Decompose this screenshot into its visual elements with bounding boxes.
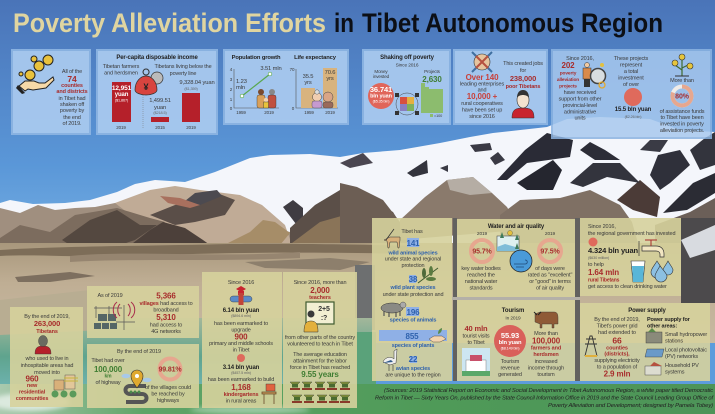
panel: wildlife species: Tibet has [401,229,423,235]
panel: teachers: from other parts of the country [285,335,355,341]
text: 202 projects: 202 [562,61,575,70]
panel: tourism: herdsmen [533,352,559,358]
red circle: tourism revenue [494,325,526,357]
title: in [334,8,354,38]
panel: tourism: to Tibet [467,340,485,346]
panel: clean drinking water: the regional government has invested [588,231,675,237]
icon: water drops [651,261,673,282]
icon: glass of water [631,261,645,282]
red circle: money invested: ($5.35 bln) [373,100,390,104]
panel: clean drinking water: Since 2016, [588,224,616,230]
panel: per-capita disposable income: Tibetan farmers [103,64,140,70]
panel: education funding: 900 [234,332,248,342]
panel: per-capita disposable income: poverty line [170,71,196,77]
panel: tourism: farmers and [531,346,561,352]
panel: relocation: new [27,383,38,389]
panel: tourism: In 2019 [505,316,521,322]
text: investment: These projects [614,56,649,62]
panel: wildlife species [372,218,452,381]
text: 74 counties: the end [63,115,81,121]
donut chart: 80 percent: alleviation projects. [660,128,705,134]
text: 202 projects: provincial-level [563,103,597,109]
panel: water and air quality: standards [469,286,493,292]
text: 202 projects: projects [559,84,577,90]
panel: power supply: systems [665,370,685,376]
panel: tourism: generated [498,372,522,378]
panel: education funding: kindergartens [224,392,258,398]
panel: shaking off poverty: invested [373,74,390,79]
text: enterprises: and [478,88,486,94]
panel: water and air quality: rated as "excellent" [528,272,572,278]
donut chart: 99.81 percent: 99.81% [158,366,182,374]
chart: population growth: mln [236,85,245,91]
panel: per-capita disposable income: and herdsmen [104,70,138,76]
chart: life expectancy: yrs [304,80,312,86]
icon: person with magnifier [583,62,606,88]
icon: night air [510,250,532,272]
text: investment: represent [620,62,643,68]
red circle: tourism revenue: 55.93 [501,331,519,340]
panel: tourism: Tourism [502,308,524,314]
panel: wildlife species: avian species [396,366,430,372]
panel: relocation: residential [19,390,46,396]
unit chart: projects: 2,630 [422,75,442,84]
text: 202 projects: alleviation [557,77,579,83]
panel: highways: 100,000 [94,365,123,374]
panel: teachers: teachers [309,295,331,301]
title: Poverty Alleviation Efforts [13,8,326,38]
icon: elderly couple [312,90,333,108]
unit chart: projects [421,75,443,118]
panel: clean drinking water: to help [588,262,604,268]
red circle: tourism revenue: bln yuan [499,340,522,346]
panel: water and air quality: key water bodies [461,266,501,272]
panel: wildlife species: 196 [406,308,420,317]
bar chart: 1,499.51 [149,98,171,104]
panel: wildlife species: protection [402,263,425,269]
panel: tourism: tourism [537,372,555,378]
chart: population growth: 3 [230,77,233,82]
panel: clean drinking water: 1.64 mln [588,268,619,277]
text: enterprises: have been set up [462,108,502,114]
panel: education funding: ($457.5 mln) [231,371,252,375]
panel: wildlife species: under state and regional [385,256,441,262]
icon: Tibetan person [35,336,51,354]
panel: power supply: stations [665,338,683,344]
panel: teachers [283,272,357,408]
panel: tourism: tourist visits [462,334,490,340]
panel: broadband: broadband [153,308,179,314]
icon: household PV [645,362,662,375]
chart: population growth: 4 [230,67,233,72]
icon: school desk [262,384,276,404]
chart: population growth: 2 [230,87,233,92]
panel: broadband: had access to [150,322,182,328]
panel: education funding: in rural areas [226,398,257,404]
panel: water and air quality: Water and air quality [488,224,545,230]
text: 202 projects: poverty [560,70,577,76]
panel: power supply: counties [606,346,628,352]
text: jobs [503,61,543,90]
chart: life expectancy: 35.5 [303,74,313,80]
panel: clean drinking water: 4.324 bln yuan [588,246,639,255]
title: Tibet Autonomous Region [362,8,663,38]
text: investment [614,56,652,119]
panel: clean drinking water: ($630 million) [588,256,610,260]
donut chart: 80 percent: 80% [675,94,690,100]
text: 74 counties [56,69,88,127]
icon: Potala palace [462,348,490,376]
donut chart: 80 percent [660,78,705,134]
icon: puzzle [395,93,419,115]
chart: population growth: 1.23 [236,79,247,85]
panel: tourism: 100,000 [532,336,561,346]
panel: education funding: ($894.6 mln) [231,314,252,318]
panel: broadband: As of 2019 [97,293,123,299]
panel: teachers: force in Tibet has reached [290,365,350,371]
panel: shaking off poverty: Projects [424,69,441,74]
panel: water and air quality: or "good" in terms [529,279,571,285]
panel: clean drinking water: get access to clean drinking water [588,284,667,290]
text: 74 counties: in Tibet had [58,96,86,102]
bar chart: yuan [154,105,166,111]
panel: education funding: Since 2016 [228,280,254,286]
text: enterprises: rural cooperatives [461,101,503,107]
text: 202 projects: units [574,116,586,122]
panel: power supply: 2.9 mln [604,370,631,378]
panel: relocation: communities [16,396,48,402]
bar chart: 2015 [155,125,165,130]
panel: relocation: 960 [26,374,39,384]
sources note: Reform in Tibet — Sixty Years On, published by the State Council Information Office in 2019 and the State Council Leading Group Office of [375,396,714,402]
red circle: money invested: bln yuan [370,94,393,100]
text: 202 projects: Since 2016, [566,56,594,62]
panel: power supply: to a population of [597,364,638,370]
icon: crane [383,349,397,371]
panel: highways: By the end of 2019 [117,349,161,355]
text: 74 counties: of 2019. [63,121,82,127]
panel: enterprises and jobs [454,50,547,124]
donut chart: 80 percent: invested in poverty [660,122,704,128]
panel: power supply: Power supply for [647,317,691,323]
panel: tourism: More than [534,331,558,337]
panel: power supply: By the end of 2019, [594,317,640,323]
panel: highways: Tibet had over [91,358,125,364]
chart: population growth: 3.51 mln [260,66,282,72]
panel: teachers: 9.55 years [301,370,339,379]
text: 202 projects [557,56,602,122]
chart: life expectancy: 70 [290,67,295,72]
panel: education funding: primary and middle schools [209,341,273,347]
panel: highways: be reached by [151,392,185,398]
panel: clean drinking water: rural Tibetans [588,278,620,284]
icon: joined hands [472,52,492,72]
bar chart: ($218.5) [153,111,167,115]
icon: money tree [672,54,693,76]
panel: tourism: Tourism [501,359,520,365]
panel: tourism: income through [528,366,564,372]
text: enterprises: 10,000 + [467,92,498,101]
panel: tourism: revenue [500,366,520,372]
text: jobs: 238,000 [510,74,536,83]
unit chart: projects: =100 [434,114,442,118]
icon: yak [534,312,558,328]
panel: wildlife species: are unique to the region [385,372,441,378]
panel: education funding: has been earmarked to build [208,377,274,383]
text: 74 counties: All of the [62,69,82,75]
text: 202 projects: support from other [559,96,602,102]
panel: relocation [10,307,83,407]
text: enterprises: since 2016 [469,114,495,120]
donut chart: 80 percent: of assistance funds [660,109,705,115]
panel: relocation: Tibetans [36,329,58,335]
donut chart: 97.5 percent: 97.5% [540,248,561,256]
chart: life expectancy: Life expectancy [294,55,337,61]
panel: wildlife species: 141 [406,239,420,248]
text: investment: 15.5 bln yuan [615,107,652,113]
panel: power supply: other areas: [647,324,677,330]
panel: teachers: attainment for the labor [293,358,347,364]
icon: graduation scroll [230,286,252,305]
panel: teachers: Since 2016, more than [294,280,346,286]
icon: family [257,89,276,108]
panel: relocation: By the end of 2019, [24,314,70,320]
panel: power supply: Tibet's power grid [597,324,637,330]
icon: hand with coins [16,55,54,94]
text: investment: investment [618,76,644,82]
heading: Per-capita disposable income [116,55,198,61]
panel: broadband: 5,310 [156,313,176,322]
icon: hand with seedling [429,328,446,342]
panel: tourism: 40 mln [464,324,488,333]
panel: teachers: 2,000 [310,286,330,295]
panel: education funding [202,272,282,408]
panel: relocation: 263,000 [34,319,60,328]
panel: highways: of highway [95,380,121,386]
red circle: money invested [368,83,394,109]
panel: highways [87,344,199,408]
panel: wildlife species: wild animal species [387,250,438,256]
icon: antelope [384,229,400,248]
panel: water and air quality: 2019 [477,231,488,237]
panel: education funding: in Tibet [233,348,250,354]
panel: wildlife species: 22 [409,355,418,364]
donut chart: 80 percent: to Tibet have been [660,115,704,121]
panel: water and air quality: of air quality [536,286,564,292]
panel: wildlife species: 855 [406,332,419,341]
panel: education funding: 3.14 bln yuan [223,365,260,371]
bar chart: ($1,867) [115,98,129,102]
chart: population growth: 0 [230,106,233,111]
icon: snow leopard [381,302,406,317]
panel: highways: highways [157,398,179,404]
heading: Shaking off poverty [380,55,435,61]
panel: wildlife species: wild plant species [390,285,436,291]
panel: counties shaken off poverty [12,50,90,134]
panel: water and air quality [457,219,575,297]
text: enterprises [460,73,504,120]
chart: population growth [230,55,282,115]
sources note: (Sources: 2019 Statistical Report on Economic and Social Development in Tibet Autonomous Region, a white paper titled Democratic [384,388,713,394]
icon: clean landscape [497,230,519,251]
panel: shaking off poverty: Since 2016 [396,62,419,68]
title [13,8,663,38]
panel: relocation: who used to live in [25,356,69,362]
chart: life expectancy: 1959 [304,110,314,115]
donut chart: 95.7 percent: 95.7% [472,248,493,256]
panel: per-capita disposable income: Tibetans living below the [154,64,212,70]
text: 74 counties: 74 [67,74,77,84]
chart: population growth: 1959 [236,110,246,115]
bar chart: yuan [115,92,129,98]
sources note [375,388,714,409]
panel: power supply [580,303,710,381]
text: jobs: This created jobs [503,61,543,67]
chart: population growth: Population growth [232,55,281,61]
panel: water and air quality: of days were [535,266,565,272]
panel: broadband [87,286,199,338]
red circle: money invested: 36.741 [370,85,392,94]
panel: wildlife species: species of animals [390,318,436,324]
panel: shaking off poverty [363,50,450,124]
panel: education funding: 6.14 bln yuan [223,308,260,314]
panel: tourism [457,300,575,381]
panel: highways: of the villages could [145,385,191,391]
icon: broadband tower [94,302,135,330]
panel: relocation: inhospitable areas had [21,363,73,369]
icon: water tap [639,240,664,257]
panel: wildlife species: 38 [409,275,418,284]
panel: wildlife species: species of plants [392,343,434,349]
panel: shaking off poverty: Money [374,69,388,74]
text: 202 projects: administrative [564,110,596,116]
panel: wildlife species: under state protection and [383,292,443,298]
text: 74 counties: counties [61,83,83,89]
text: investment: ($2.26 bln) [625,115,642,119]
chart: life expectancy: 70.6 [325,70,335,76]
icon: residential buildings [52,375,78,398]
panel: education funding: has been earmarked to [214,321,268,327]
panel: power supply: had extended to [598,330,636,336]
panel: relocation: moved into [34,370,60,376]
panel: power supply: supplying electricity [594,358,640,364]
sources note: Poverty Alleviation and Development; designed by Pamela Tobey) [548,403,713,409]
bar chart [112,80,215,130]
chart: life expectancy [290,55,338,115]
text: enterprises: Over 140 [466,73,499,82]
panel: per-capita disposable income [97,50,217,134]
panel: clean drinking water [580,218,681,296]
panel: power supply: Small hydropower [665,332,707,338]
red circle: tourism revenue: ($8.149 bln) [501,346,520,350]
panel: teachers: The average education [293,352,347,358]
text: 74 counties: and districts [56,89,88,95]
text: 74 counties: shaken off [60,102,85,108]
chart: population growth: 1 [230,97,233,102]
icon: solar panel [645,349,664,357]
text: jobs: poor Tibetans [506,84,540,90]
text: enterprises: leading enterprises [460,82,504,88]
icon: power tower [585,336,597,356]
bar chart: 12,951 [112,85,132,92]
bar chart: 9,328.04 yuan [179,80,215,86]
panel: broadband: 4G networks [151,329,181,335]
panel: population growth and life expectancy [224,50,348,124]
panel: broadband: 5,366 [156,292,176,300]
text: 202 projects: have received [564,90,596,96]
chart: life expectancy: yrs [326,76,334,82]
icon: road with location pin [122,370,152,402]
panel: poverty alleviation projects [552,50,711,138]
icon: teacher at board [304,302,334,332]
bar chart: 2019 [186,125,196,130]
chart: life expectancy: 2019 [325,110,335,115]
text: 74 counties: poverty by [60,108,84,114]
icon: plant branch [418,266,438,283]
bar chart: ($1,359) [184,87,198,91]
panel: education funding: upgrade [231,328,251,334]
icon: Tibetan person [512,90,534,118]
bar chart: 2019 [116,125,126,130]
panel: power supply: Local photovoltaic [665,348,707,354]
text: investment: of over [623,82,639,88]
donut chart: 80 percent: More than [670,78,694,84]
panel: highways: km [104,374,112,380]
chart: life expectancy: 0 [292,106,295,111]
panel: broadband: villages had access to [139,301,193,307]
chart: population growth: 2019 [264,110,274,115]
panel: power supply: Household PV [665,363,699,369]
panel: education funding: 1,168 [231,383,251,392]
panel: water and air quality: reached the [467,272,495,278]
panel: tourism: increased [535,359,557,365]
panel: power supply: (PV) networks [665,354,698,360]
text: jobs: for [520,68,526,74]
panel: power supply: (districts), [604,352,630,358]
panel: power supply: 66 [612,336,622,346]
icon: teacher at board: 2+5 [318,306,330,313]
panel: water and air quality: 2019 [545,231,556,237]
icon: red purse with yuan: ¥ [144,82,149,92]
text: investment: a total [624,69,638,75]
panel: teachers: volunteered to teach in Tibet [287,342,353,348]
icon: hydropower station [646,328,662,343]
panel: water and air quality: national water [465,279,498,285]
panel: power supply: Power supply [628,308,667,314]
pictogram: graduation caps [290,382,350,403]
icon: teacher at board: :? [321,315,327,322]
